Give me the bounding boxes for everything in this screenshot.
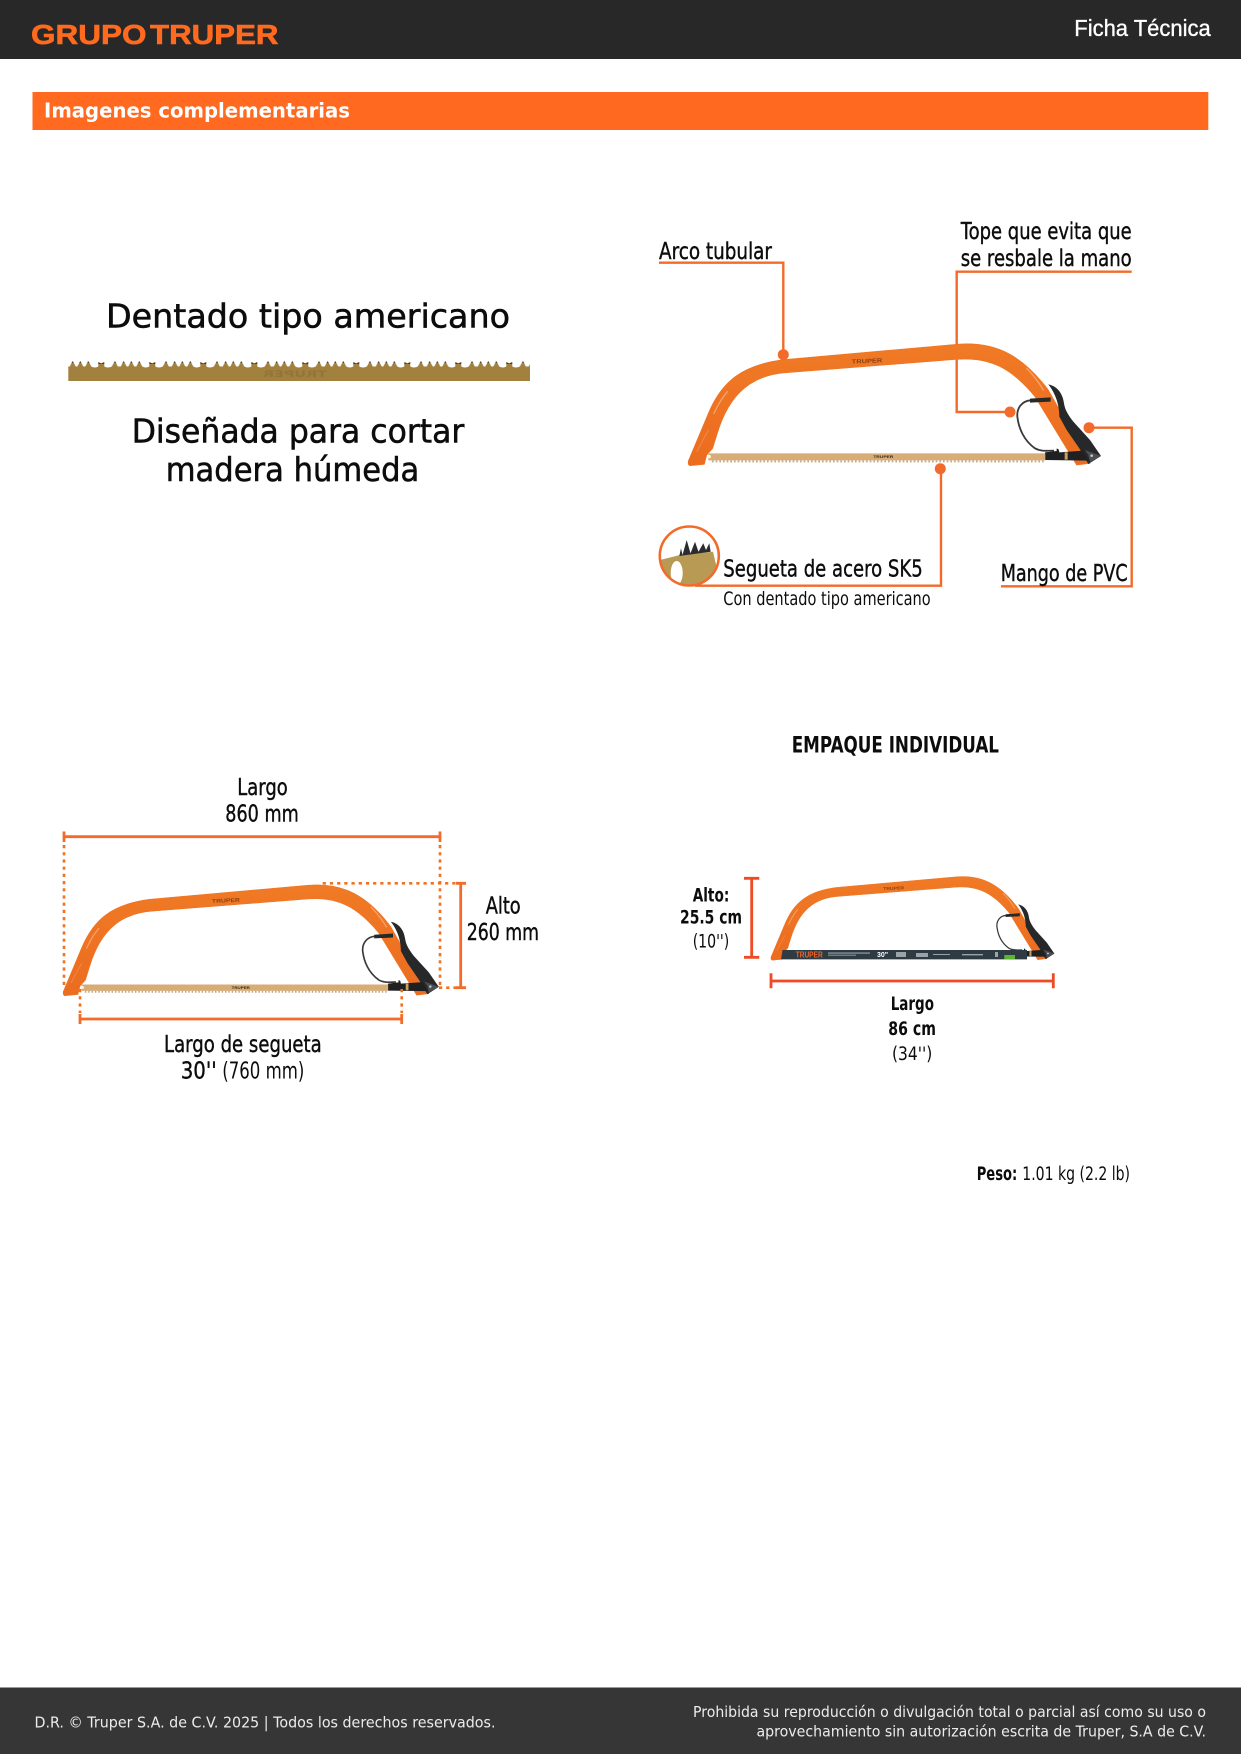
dimension: alto: 260 mm	[467, 920, 539, 946]
dimension: alto	[323, 883, 539, 988]
legal notice: aprovechamiento sin autorización escrita de Truper, S.A de C.V.	[756, 1723, 1206, 1741]
dimension: largo: 86 cm	[888, 1019, 936, 1040]
blade packaging sleeve: TRUPER	[796, 950, 823, 959]
blade tooth detail: TRUPER	[263, 370, 327, 380]
blade packaging sleeve	[781, 950, 1027, 959]
logo: Grupo Truper	[31, 19, 278, 50]
bow saw illustration	[63, 885, 439, 996]
dimension: largo: (34'')	[892, 1044, 932, 1065]
dimension: largo	[771, 973, 1053, 1065]
label: mango: Mango de PVC	[1001, 561, 1128, 587]
callout line: arco tubular	[659, 263, 789, 360]
dimension: alto: Alto	[486, 893, 521, 919]
bow saw illustration: TRUPER	[232, 986, 251, 990]
panel: individual packaging	[680, 732, 1130, 1185]
bow saw illustration: TRUPER	[873, 455, 894, 459]
bow saw illustration	[688, 344, 1101, 466]
dimension: largo: 860 mm	[225, 802, 299, 828]
panel: parts diagram	[655, 219, 1132, 610]
sublabel: segueta: Con dentado tipo americano	[723, 588, 931, 610]
dimension: alto: 25.5 cm	[680, 907, 742, 928]
weight: 1.01 kg (2.2 lb)	[1022, 1164, 1130, 1185]
packaged saw illustration: TRUPER	[883, 885, 904, 891]
dimension: largo de segueta: Largo de segueta	[164, 1032, 322, 1058]
section heading bar	[32, 92, 1208, 130]
dimension: largo de segueta: 30''	[181, 1058, 217, 1084]
label: arco tubular: Arco tubular	[659, 239, 772, 265]
blade packaging sleeve: 30"	[877, 952, 888, 959]
weight: Peso:	[977, 1164, 1017, 1185]
dimension: largo de segueta	[80, 989, 402, 1084]
callout line: tope	[957, 272, 1132, 418]
panel: tooth type	[68, 297, 530, 489]
label: segueta: Segueta de acero SK5	[723, 557, 923, 583]
bow saw illustration: TRUPER	[852, 358, 883, 366]
header bar	[0, 0, 1241, 59]
callout line: mango	[1001, 422, 1132, 586]
legal notice: Prohibida su reproducción o divulgación total o parcial así como su uso o	[693, 1703, 1206, 1721]
dimension: alto	[680, 878, 759, 957]
icon: blade tooth inset	[655, 526, 722, 590]
packaged saw illustration	[771, 877, 1054, 960]
document type label: Ficha Técnica	[1074, 15, 1211, 41]
dimension: largo: Largo	[891, 994, 934, 1015]
bow saw illustration: TRUPER	[212, 898, 240, 905]
usage text: madera húmeda	[166, 450, 419, 489]
footer bar	[0, 1688, 1241, 1754]
usage text	[132, 412, 465, 489]
label: tope	[960, 219, 1132, 272]
legal notice	[693, 1703, 1206, 1741]
copyright text: D.R. © Truper S.A. de C.V. 2025 | Todos los derechos reservados.	[34, 1713, 496, 1731]
usage text: Diseñada para cortar	[132, 412, 465, 451]
callout line: segueta	[695, 463, 946, 586]
weight	[977, 1164, 1130, 1185]
heading: empaque individual: EMPAQUE INDIVIDUAL	[792, 732, 999, 758]
dimension: alto: Alto:	[693, 886, 729, 907]
dimension: largo de segueta: (760 mm)	[222, 1058, 304, 1084]
label: tope: se resbale la mano	[961, 246, 1132, 272]
heading: tooth type: Dentado tipo americano	[106, 297, 510, 336]
label: tope: Tope que evita que	[960, 219, 1132, 245]
panel: product dimensions	[63, 775, 539, 1084]
section heading text: Imagenes complementarias	[44, 98, 350, 122]
dimension: alto: (10'')	[693, 931, 729, 952]
logo: Grupo Truper: GRUPO	[31, 19, 146, 50]
dimension: largo	[64, 775, 440, 987]
dimension: largo: Largo	[237, 775, 288, 801]
blade tooth detail	[68, 360, 530, 381]
logo: Grupo Truper: TRUPER	[150, 19, 278, 50]
